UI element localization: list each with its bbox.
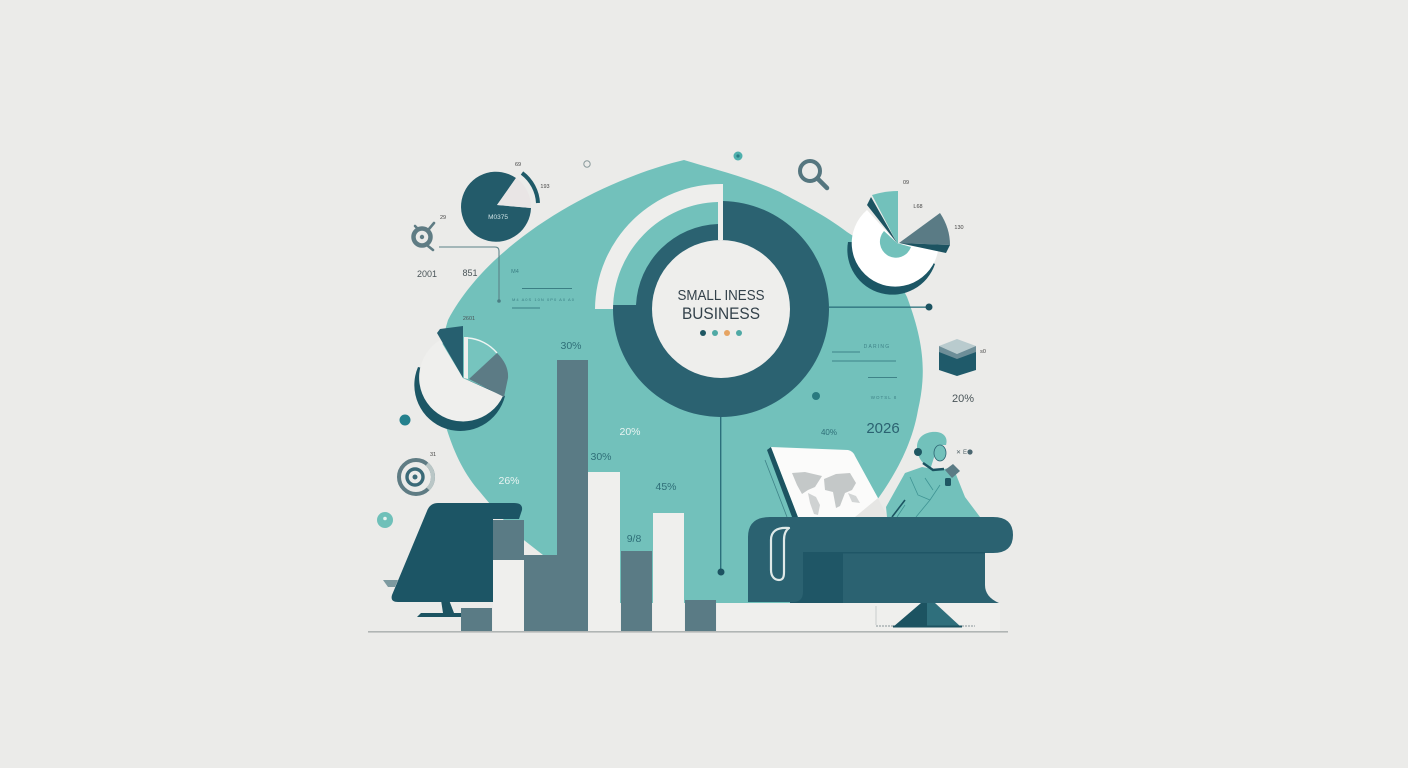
left pie chart [414,316,508,431]
left blob annotation [511,269,575,308]
small outlined circle [584,161,590,167]
four status dots [700,330,742,336]
decorative teal dot [400,414,410,426]
bar value labels: 30% [560,340,582,352]
labels 2001 and 851 [417,268,478,279]
bar value labels: 20% [619,426,641,438]
small teal circle icon [377,512,393,528]
labels 2001 and 851: 851 [462,268,478,278]
left blob annotation: M4 [511,269,519,275]
right blob annotation: DARING [864,344,890,350]
decorative dark dot [812,392,820,400]
person figure [886,432,980,517]
right blob annotation: WOTSL 8 [871,395,897,400]
label 20%: 20% [952,393,974,405]
donut centre title: SMALL INESS [678,288,764,304]
icon: concentric target: 31 [430,452,436,458]
top-left pie chart [461,162,550,242]
top-right pie chart: L68 [913,204,923,210]
bar value labels: 9/8 [627,533,641,545]
label 40%: 40% [821,428,837,437]
connector from target icon [439,247,499,301]
top-left pie chart: 193 [540,184,550,190]
small teal dot [734,152,742,160]
bar value labels: 45% [655,481,677,493]
donut centre title [678,288,764,323]
top-right pie chart [847,180,964,295]
connector from donut to bottom [718,417,724,576]
top-right pie chart: 130 [954,225,964,231]
connector end dot [497,299,501,303]
bar value labels: 26% [498,475,520,487]
top-left pie chart: M0375 [488,214,508,221]
baseline [368,631,1008,633]
right blob annotation [832,344,897,400]
lower floor panel [717,603,1000,632]
top-left pie chart: 69 [515,162,521,168]
left blob annotation: M4 A0S 10N 0P0 A0 A0 [512,297,575,302]
connector from donut to right [829,304,932,310]
icon: magnifier [800,161,827,188]
icon: cube: s0 [980,349,986,355]
person figure: E [963,450,967,456]
labels 2001 and 851: 2001 [417,269,437,279]
teal background blob [440,160,923,603]
bar chart [461,360,716,632]
label 2026: 2026 [866,420,900,437]
world map shapes [792,472,860,515]
icon: gear target [414,215,446,250]
icon: cube [939,339,986,376]
sofa arm clip [771,528,789,580]
monitor stand [876,603,975,628]
left monitor [383,503,522,617]
central donut chart [595,184,829,417]
tablet with world map [765,447,888,517]
bar value labels: 30% [590,451,612,463]
left pie chart: 2601 [463,316,475,322]
person figure: ✕ [956,450,961,456]
icon: gear target: 29 [440,215,446,221]
top-right pie chart: 09 [903,180,909,186]
icon: concentric target [399,452,436,494]
bar value labels [498,340,677,545]
donut centre title: BUSINESS [682,305,760,323]
sofa desk [748,517,1013,603]
